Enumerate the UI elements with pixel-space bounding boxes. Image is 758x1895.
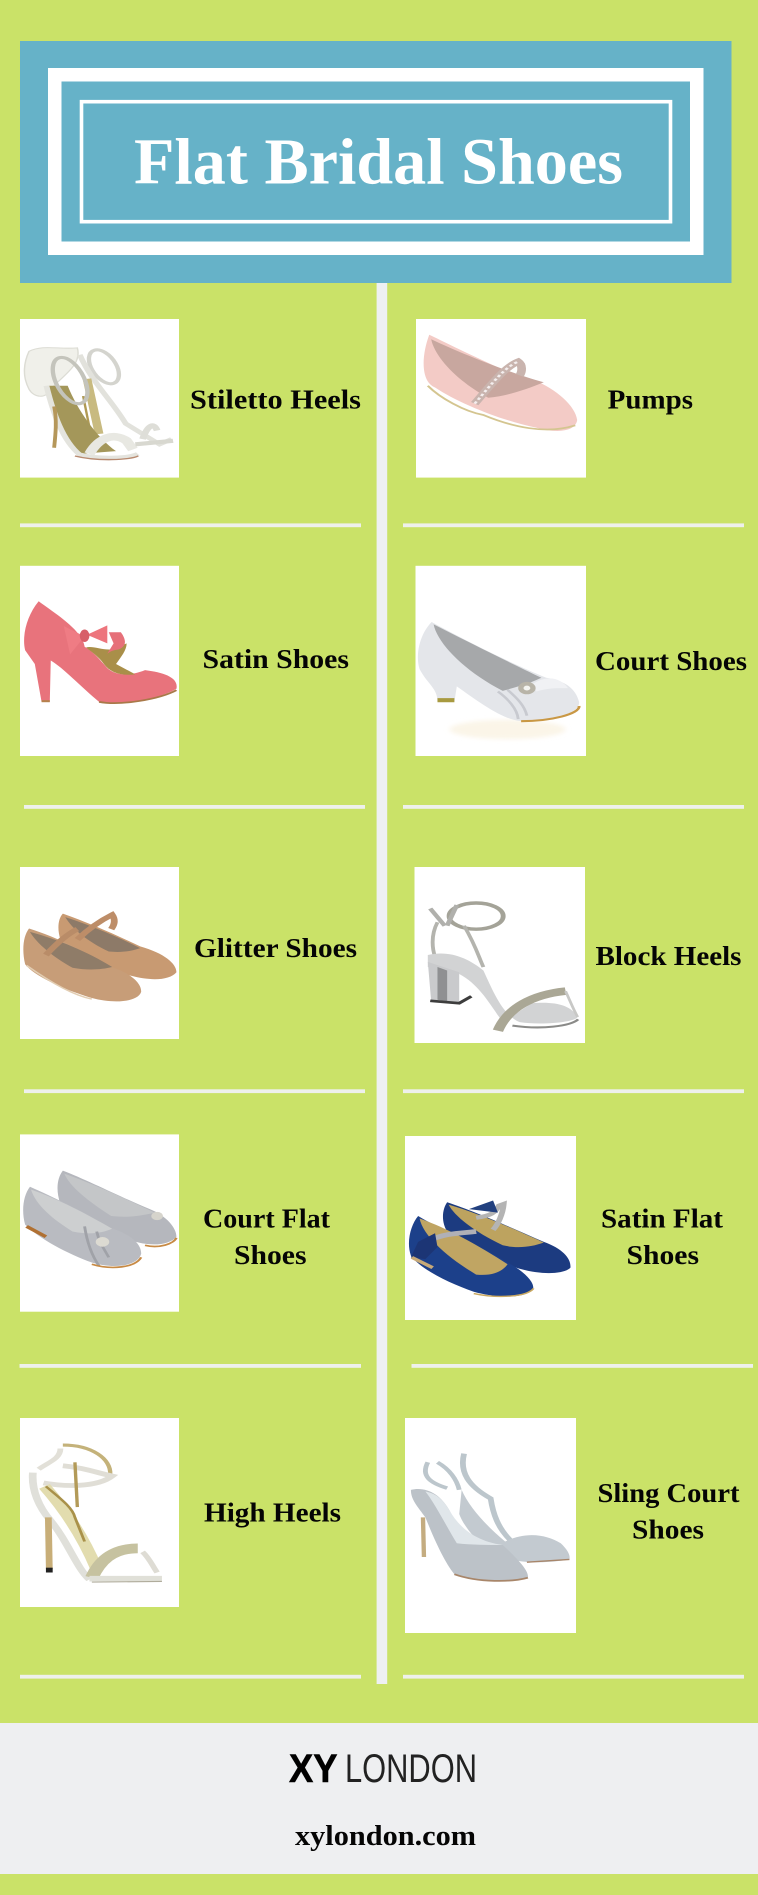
row divider left 5: [20, 1675, 361, 1679]
label: Pumps: [608, 384, 693, 414]
label: Satin Shoes: [202, 644, 349, 674]
label: [598, 1478, 740, 1545]
label: [601, 1204, 723, 1270]
label: Sling Court: [598, 1478, 740, 1508]
row divider right 3: [403, 1089, 744, 1093]
image card: [416, 319, 586, 478]
center divider: [377, 283, 387, 1684]
item: Court Shoes: [416, 566, 747, 756]
icon: white stiletto sandals: [24, 347, 173, 460]
logo: XY London: [289, 1747, 477, 1791]
label: Court Flat: [203, 1204, 330, 1234]
icon: coral satin heel: [24, 601, 177, 703]
label: Block Heels: [596, 941, 742, 971]
logo: XY London: XY: [289, 1747, 338, 1791]
label: High Heels: [204, 1498, 341, 1528]
title: Flat Bridal Shoes: [134, 126, 623, 198]
icon: pink satin flat: [424, 335, 577, 431]
label: Satin Flat: [601, 1204, 723, 1234]
row divider right 5: [403, 1675, 744, 1679]
header banner: [20, 41, 732, 283]
icon: silver block heel sandal: [428, 903, 578, 1031]
row divider right 4: [412, 1364, 753, 1368]
label: Shoes: [626, 1240, 699, 1270]
logo: XY London: LONDON: [345, 1747, 477, 1791]
icon: silver slingback heels: [411, 1454, 570, 1581]
label: Shoes: [234, 1240, 306, 1270]
image card: [20, 1134, 179, 1312]
item: High Heels: [20, 1418, 341, 1607]
image card: [20, 1418, 179, 1607]
icon: grey satin flats: [23, 1171, 176, 1267]
item: Satin Shoes: [20, 566, 349, 756]
row divider left 3: [24, 1089, 365, 1093]
label: Glitter Shoes: [194, 933, 357, 963]
item: Glitter Shoes: [20, 867, 357, 1039]
icon: rose gold glitter flats: [23, 914, 176, 1001]
item: Block Heels: [414, 867, 742, 1043]
row divider left 1: [20, 523, 361, 527]
label: Shoes: [632, 1515, 704, 1545]
item: Court Flat Shoes: [20, 1134, 330, 1312]
item: Sling Court Shoes: [405, 1418, 740, 1633]
item: Pumps: [416, 319, 693, 478]
row divider right 2: [403, 805, 744, 809]
image card: [416, 566, 586, 756]
item: Satin Flat Shoes: [405, 1136, 723, 1320]
website: xylondon.com: [295, 1821, 476, 1852]
image card: [20, 867, 179, 1039]
image card: [414, 867, 585, 1043]
label: [203, 1204, 330, 1270]
label: Stiletto Heels: [190, 384, 361, 414]
row divider left 2: [24, 805, 365, 809]
image card: [20, 566, 179, 756]
image card: [20, 319, 179, 478]
footer band: [0, 1723, 758, 1874]
image card: [405, 1136, 576, 1320]
image card: [405, 1418, 576, 1633]
icon: navy satin flats: [409, 1201, 570, 1297]
row divider right 1: [403, 523, 744, 527]
row divider left 4: [20, 1364, 361, 1368]
icon: white low heel court shoe: [418, 622, 579, 739]
icon: white ankle strap high heel: [33, 1445, 162, 1582]
item: Stiletto Heels: [20, 319, 361, 478]
label: Court Shoes: [595, 646, 747, 676]
